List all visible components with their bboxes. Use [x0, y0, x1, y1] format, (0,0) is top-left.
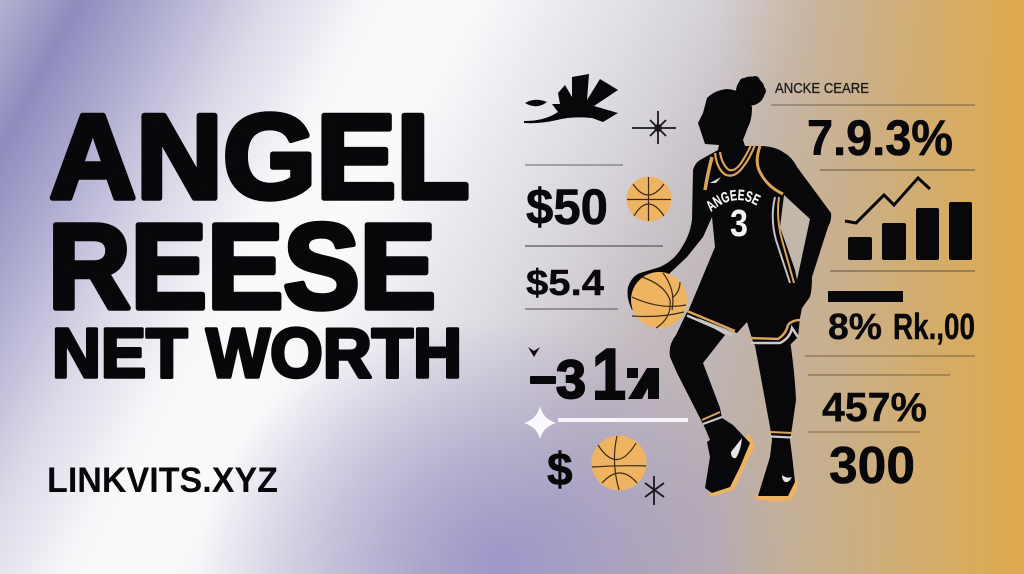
chart: growth bars and line [830, 178, 975, 271]
stat: 7.9.3%: 7.9.3% [807, 110, 953, 166]
icon: basketball large [592, 436, 646, 490]
left leg [670, 312, 750, 493]
shoe soles [712, 437, 796, 499]
icon: star [632, 111, 676, 144]
title: ANGEL [50, 90, 470, 224]
white divider [558, 418, 688, 422]
jersey number: 3 [730, 203, 748, 245]
icon: sparkle [524, 406, 556, 439]
body [628, 89, 831, 345]
player silhouette [628, 76, 832, 502]
title: REESE [48, 198, 436, 334]
icon: asterisk [645, 476, 664, 505]
stat: 8% and amount [805, 291, 975, 375]
title: NET WORTH [52, 314, 462, 392]
title [48, 90, 470, 392]
stat: $50: $50 [526, 179, 608, 235]
stat: minus 3 1 percent: 1 [592, 335, 626, 415]
icon: basketball small [626, 176, 672, 222]
gap between torso and forearm [780, 195, 810, 280]
logo swoosh marks [710, 177, 792, 482]
jersey trim [687, 145, 800, 438]
stat: 300: 300 [829, 437, 915, 495]
jersey name: ANGEESE [706, 190, 761, 212]
stat: 457%: 457% [822, 384, 927, 430]
stat: 8% and amount: 8% [828, 306, 882, 347]
stat: 8% and amount: Rk.,00 [893, 306, 975, 347]
stat header: ANCKE CEARE [775, 81, 869, 97]
stat: dollar sign: $ [547, 443, 573, 495]
hair bun [736, 76, 766, 106]
icon: leaf burst [524, 74, 618, 123]
stat: minus 3 1 percent [528, 335, 659, 415]
right leg [754, 340, 796, 496]
stat: $5.4: $5.4 [526, 262, 604, 303]
stat: $5.4 [525, 246, 663, 309]
website label: LINKVITS.XYZ [47, 461, 278, 500]
basketball [631, 272, 687, 328]
stat: minus 3 1 percent: 3 [556, 350, 586, 410]
stat: $50 [525, 165, 623, 235]
